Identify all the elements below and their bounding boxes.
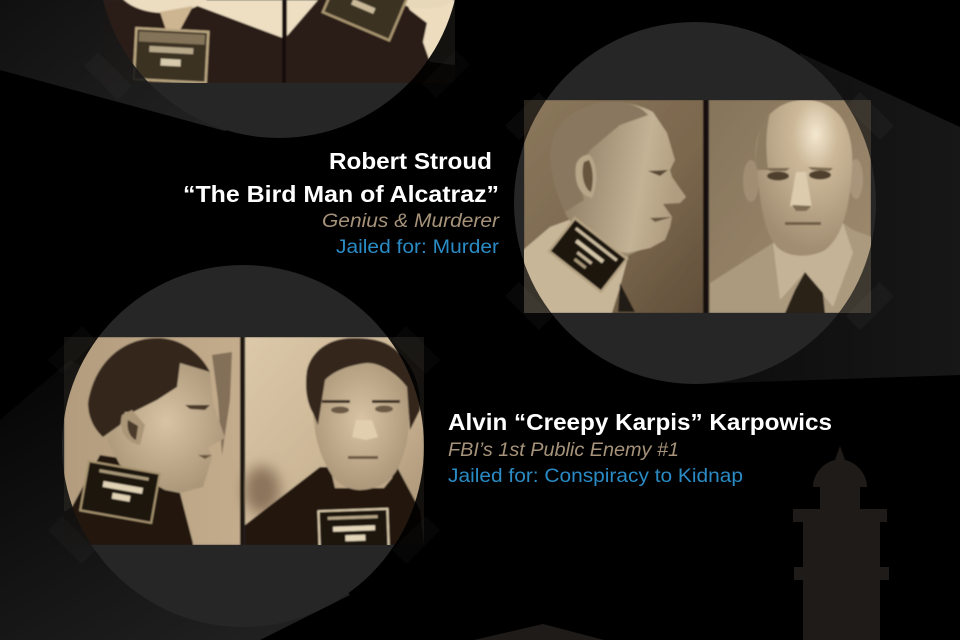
spotlight beam: bottom left bbox=[0, 360, 350, 640]
text block: Robert Stroud: Genius & Murderer bbox=[322, 210, 501, 232]
text block: Robert Stroud: “The Bird Man of Alcatraz” bbox=[183, 181, 499, 207]
text block: Alvin Karpowics: Alvin “Creepy Karpis” Karpowics bbox=[448, 409, 832, 435]
text block: Alvin Karpowics: FBI’s 1st Public Enemy #1 bbox=[448, 439, 679, 461]
mugshot photo: top inmate bbox=[103, 0, 455, 83]
text block: Alvin Karpowics: Jailed for: Conspiracy to Kidnap bbox=[448, 465, 743, 487]
text block: Robert Stroud bbox=[183, 148, 501, 258]
tape corners: top photo bbox=[84, 50, 470, 100]
icon: lighthouse silhouette bbox=[793, 446, 889, 640]
spotlight beam: top left bbox=[0, 0, 279, 131]
tape corners: middle photo bbox=[505, 92, 894, 330]
spotlight beam: right bbox=[695, 53, 960, 384]
text block: Alvin Karpowics bbox=[448, 409, 832, 487]
spotlight circle: middle bbox=[514, 22, 876, 384]
tape corners: bottom photo bbox=[48, 326, 440, 564]
mugshot photo: Robert Stroud bbox=[523, 100, 872, 313]
text block: Robert Stroud: Robert Stroud bbox=[329, 148, 492, 174]
spotlight circle: top bbox=[98, 0, 460, 138]
text block: Robert Stroud: Jailed for: Murder bbox=[336, 236, 500, 258]
spotlight circle: bottom bbox=[62, 265, 424, 627]
icon: building roof silhouette bbox=[474, 624, 604, 640]
mugshot photo: Alvin Karpowics bbox=[64, 337, 424, 555]
